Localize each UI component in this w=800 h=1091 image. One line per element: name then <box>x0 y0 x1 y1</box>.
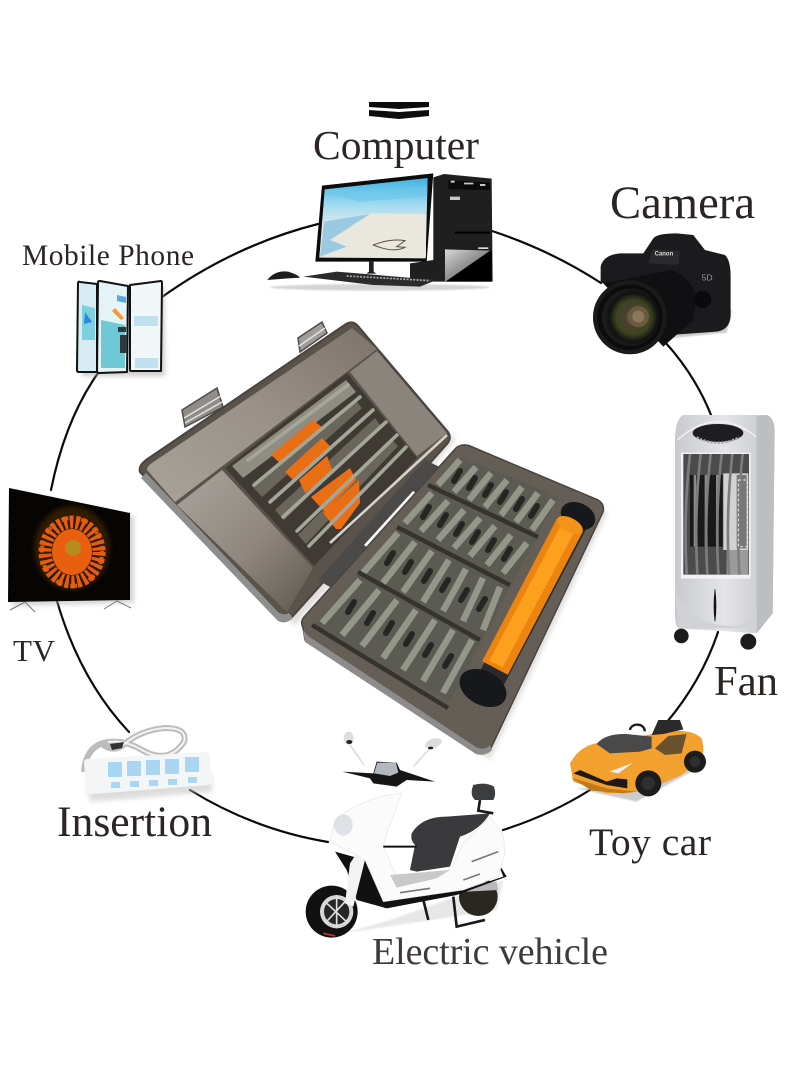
hinge clip right <box>298 322 327 352</box>
icon: computer <box>267 173 493 291</box>
dark bit holes <box>348 471 537 666</box>
label: Camera: Camera <box>610 177 755 229</box>
icon: top chevron <box>369 102 429 119</box>
icon: TV <box>8 488 134 612</box>
icon: power strip <box>84 728 212 802</box>
icon: camera: 5D <box>702 273 713 283</box>
hinge band <box>318 460 442 590</box>
base shell <box>302 445 603 754</box>
connecting ring <box>51 224 718 842</box>
icon: camera <box>593 233 732 354</box>
lid shell <box>140 322 450 620</box>
label: Insertion: Insertion <box>57 798 212 846</box>
icon: electric scooter <box>306 732 507 938</box>
lid right panel <box>350 351 447 456</box>
label: Fan: Fan <box>714 658 778 705</box>
front wheel <box>306 853 365 938</box>
screwdriver bits <box>322 460 553 693</box>
handlebar and mirrors <box>342 732 443 787</box>
hinge clip left <box>182 388 223 427</box>
tool shafts <box>248 385 406 546</box>
lid top strip <box>147 328 377 502</box>
orange handle <box>453 497 600 715</box>
tweezers <box>330 435 447 543</box>
icon: toy car <box>570 720 707 802</box>
backrest <box>472 784 495 800</box>
tray dividers <box>312 485 538 708</box>
icon: air cooler fan <box>674 415 775 650</box>
black chassis <box>335 852 507 908</box>
tool box: open precision screwdriver set <box>140 322 608 760</box>
white body <box>330 793 505 902</box>
label: Mobile Phone: Mobile Phone <box>22 240 194 272</box>
lid recess with tools <box>225 373 447 566</box>
rear wheel <box>459 877 498 916</box>
label: TV: TV <box>13 633 56 668</box>
icon: camera: Canon <box>655 251 674 257</box>
lid left panel <box>177 470 313 612</box>
label: Electric vehicle: Electric vehicle <box>372 931 608 973</box>
seat <box>410 813 490 872</box>
bit tray <box>312 457 558 702</box>
label: Toy car: Toy car <box>589 820 711 864</box>
label: Computer: Computer <box>313 122 479 168</box>
orange grips <box>271 420 360 529</box>
icon: mobile phones <box>77 281 165 376</box>
box soft shadow <box>146 330 608 760</box>
